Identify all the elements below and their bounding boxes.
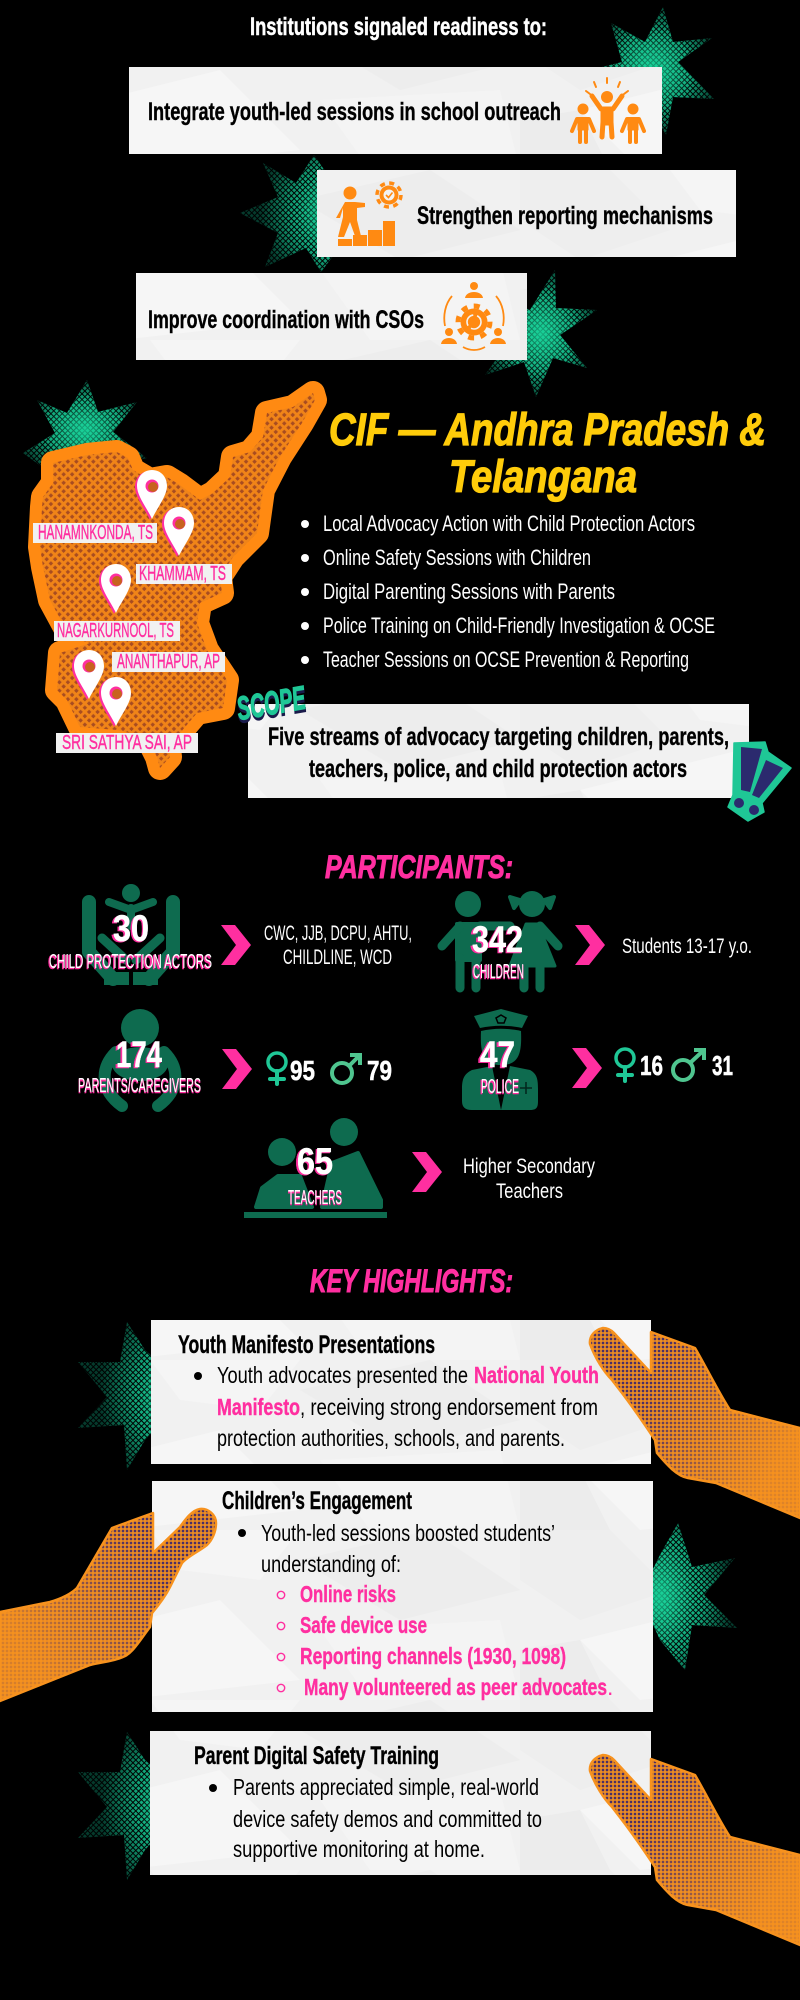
- icon: male: [349, 1055, 360, 1066]
- participant: children: 342: [472, 919, 523, 960]
- list of advocacy streams: Digital Parenting Sessions with Parents: [323, 579, 615, 604]
- count 47: 47: [478, 1035, 513, 1076]
- map label: Khammam: [136, 563, 232, 585]
- sub-list: [277, 1581, 613, 1700]
- map pin: Sri Sathya Sai: [99, 677, 131, 727]
- sub-list: .: [607, 1674, 613, 1700]
- participant: child protection actors: CHILD PROTECTION ACTORS: [49, 951, 212, 973]
- scope label: SCOPE: [234, 679, 309, 727]
- description: protection actors: CHILDLINE, WCD: [283, 946, 392, 969]
- card body: [194, 1362, 599, 1451]
- card body: Youth advocates presented the: [217, 1362, 468, 1388]
- heading: CIF Andhra Pradesh and Telangana: Telangana: [449, 451, 637, 502]
- card body: Manifesto: [217, 1394, 300, 1420]
- description: protection actors: [264, 922, 412, 969]
- description: teachers: Teachers: [496, 1180, 563, 1203]
- map label: Nagarkurnool: [54, 620, 180, 642]
- map label: Ananthapur: [112, 651, 225, 673]
- decorative star left of manifesto card: [78, 1322, 190, 1470]
- map pin: Ananthapur: [72, 650, 104, 700]
- participant: police: 47: [480, 1034, 515, 1075]
- map pin: Nagarkurnool: [99, 564, 131, 614]
- participant: child protection actors: [48, 884, 212, 985]
- sub-list: Many volunteered as peer advocates: [304, 1674, 607, 1700]
- heading: participants: PARTICIPANTS:: [325, 849, 513, 885]
- description: teachers: [463, 1155, 595, 1203]
- map pin: Khammam: [162, 507, 194, 557]
- list of advocacy streams: [301, 511, 715, 672]
- participant: children: [442, 891, 558, 988]
- map of Andhra Pradesh and Telangana: [33, 393, 315, 768]
- scope label: SCOPE: [234, 682, 309, 730]
- icon: group of people cheering: [572, 78, 644, 142]
- count 65: 65: [295, 1142, 332, 1183]
- description: teachers: Higher Secondary: [463, 1155, 595, 1178]
- participant: teachers: [244, 1118, 387, 1218]
- map label: Sri Sathya Sai: [56, 732, 198, 754]
- participant: parents and caregivers: 174: [116, 1034, 162, 1075]
- scope label: [234, 679, 309, 730]
- participant: children: CHILDREN: [473, 961, 524, 983]
- gender split: parents: [268, 1053, 392, 1086]
- card: strengthen reporting mechanisms: [317, 170, 736, 257]
- decorative star left of parent card: [78, 1732, 190, 1880]
- list of advocacy streams: Online Safety Sessions with Children: [323, 545, 591, 570]
- gender split: police: 31: [712, 1050, 733, 1081]
- decorative star above map: [23, 380, 147, 480]
- icon: exclamation marks: [728, 742, 791, 821]
- icon: police officer: [462, 1009, 538, 1110]
- label: POLICE: [480, 1077, 519, 1099]
- label: CHILDREN: [472, 962, 524, 984]
- decorative star right of coordination card: [485, 270, 597, 397]
- participant: teachers: 65: [297, 1141, 333, 1182]
- card: integrate youth-led sessions: [129, 67, 662, 154]
- count 174: 174: [114, 1035, 161, 1076]
- map label: Hanamnkonda: [33, 522, 157, 544]
- decorative star top right: [590, 7, 714, 135]
- title: Institutions signaled readiness to:: [250, 13, 547, 41]
- participant: teachers: TEACHERS: [288, 1187, 342, 1209]
- card: parent digital safety training: [150, 1731, 651, 1875]
- icon: teacher and student at desk: [244, 1118, 387, 1218]
- card body: , receiving strong endorsement from: [300, 1394, 598, 1420]
- gender split: parents: 79: [367, 1055, 392, 1086]
- card body: supportive monitoring at home.: [233, 1836, 485, 1862]
- card body: Parents appreciated simple, real-world: [233, 1774, 539, 1800]
- description: protection actors: CWC, JJB, DCPU, AHTU,: [264, 922, 412, 945]
- sub-list: Online risks: [300, 1581, 396, 1607]
- participant: teachers: TEACHERS: [288, 1188, 342, 1210]
- gender split: police: [616, 1049, 733, 1081]
- icon: person climbing steps towards gear: [336, 183, 401, 246]
- card: youth manifesto presentations: [151, 1320, 651, 1464]
- card: children's engagement: [152, 1481, 653, 1712]
- icon: male: [690, 1050, 704, 1063]
- hand illustration: left: [0, 1509, 216, 1701]
- icon: hands holding child: [89, 884, 173, 985]
- card body: device safety demos and committed to: [233, 1806, 542, 1832]
- icon: female: [618, 1067, 632, 1081]
- map label: Nagarkurnool: NAGARKURNOOL, TS: [57, 620, 174, 642]
- participant: child protection actors: 30: [113, 908, 149, 949]
- arrow: [221, 925, 251, 965]
- heading: key highlights: KEY HIGHLIGHTS:: [310, 1263, 513, 1299]
- arrow: [572, 1048, 602, 1088]
- card text: Integrate youth-led sessions in school outreach: [148, 98, 561, 126]
- map label: Sri Sathya Sai: SRI SATHYA SAI, AP: [62, 732, 192, 754]
- card body: understanding of:: [261, 1551, 401, 1577]
- card heading: Youth Manifesto Presentations: [178, 1331, 435, 1359]
- participant: parents and caregivers: PARENTS/CAREGIVERS: [78, 1075, 201, 1097]
- arrow: [412, 1152, 442, 1192]
- decorative star right of engagement card: [640, 1523, 737, 1670]
- gender split: parents: 95: [290, 1055, 315, 1086]
- map label: Khammam: KHAMMAM, TS: [139, 563, 226, 585]
- participant: parents and caregivers: [78, 1009, 201, 1106]
- decorative star middle left: [240, 155, 345, 272]
- card heading: Parent Digital Safety Training: [194, 1742, 439, 1770]
- icon: gear with people around: [441, 282, 506, 350]
- arrow: [222, 1049, 252, 1089]
- map pin: Hanamkonda: [135, 470, 167, 520]
- hand illustration: right bottom: [590, 1755, 800, 1945]
- map label: Ananthapur: ANANTHAPUR, AP: [117, 651, 220, 673]
- heading: CIF Andhra Pradesh and Telangana: [329, 404, 766, 502]
- description: students: Students 13-17 y.o.: [622, 935, 752, 958]
- count 30: 30: [111, 909, 148, 950]
- gender split: police: 16: [640, 1050, 663, 1081]
- sub-list: Safe device use: [300, 1612, 427, 1638]
- card body: protection authorities, schools, and parents.: [217, 1425, 565, 1451]
- participant: police: [462, 1009, 538, 1110]
- count 342: 342: [470, 920, 522, 961]
- label: CHILD PROTECTION ACTORS: [48, 952, 211, 974]
- participant: police: POLICE: [481, 1076, 519, 1098]
- arrow: [575, 925, 605, 965]
- map label: Hanamnkonda: HANAMNKONDA, TS: [38, 522, 153, 544]
- card body: [238, 1520, 555, 1577]
- card text: Improve coordination with CSOs: [148, 306, 424, 334]
- hand illustration: right top: [590, 1328, 800, 1518]
- card body: National Youth: [474, 1362, 599, 1388]
- scope card: [248, 704, 749, 798]
- card: improve coordination: [136, 273, 527, 360]
- card body: Youth-led sessions boosted students’: [261, 1520, 555, 1546]
- card heading: Children’s Engagement: [222, 1487, 412, 1515]
- icon: parent embracing child: [105, 1009, 175, 1106]
- icon: female: [270, 1071, 284, 1084]
- card body: [209, 1774, 542, 1862]
- label: PARENTS/CAREGIVERS: [78, 1076, 201, 1098]
- icon: boy and girl: [442, 891, 558, 988]
- sub-list: Reporting channels (1930, 1098): [300, 1643, 566, 1669]
